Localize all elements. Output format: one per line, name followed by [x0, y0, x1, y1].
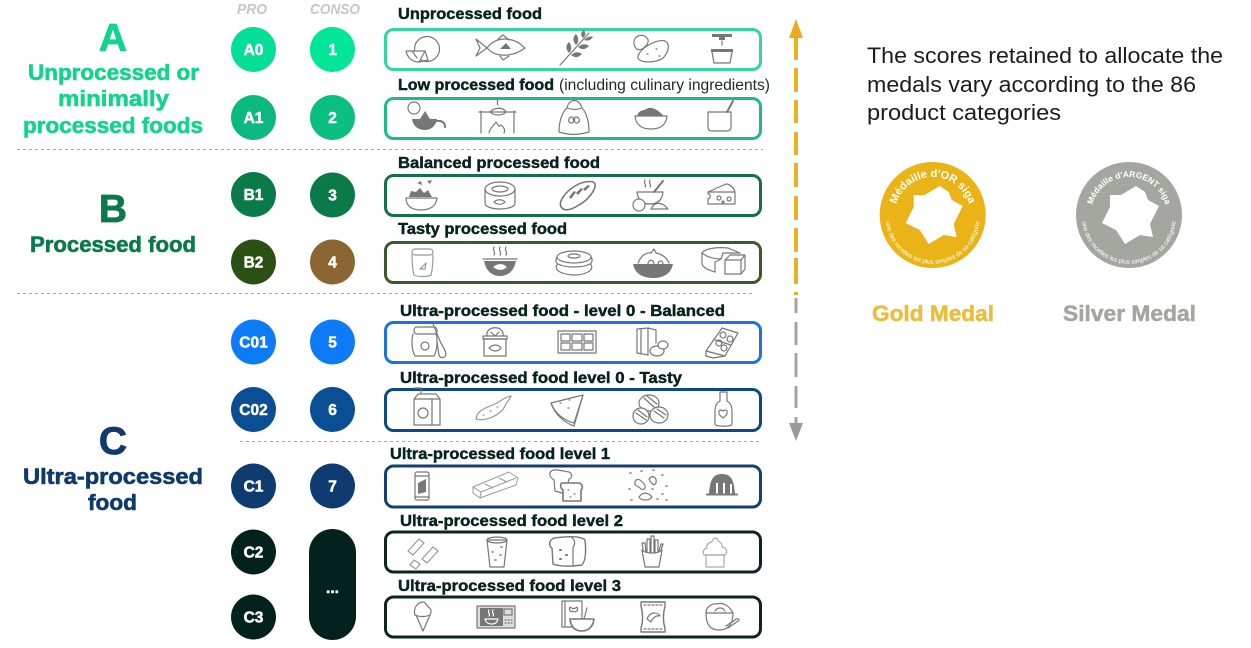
column heading: CONSO: CONSO [310, 1, 360, 18]
icon: orange [406, 36, 440, 62]
icon: chocolate bar [558, 331, 596, 353]
panel: category B heading: Processed food [30, 232, 196, 257]
badges: CONSO column: 7 [328, 478, 337, 496]
panel: Ultra-processed food level 0 Tasty: Ultra-processed food level 0 - Tasty [400, 370, 682, 387]
badges: PRO column: A0 [244, 42, 263, 59]
panel: Tasty processed food [384, 19, 1223, 638]
panel: category C heading: Ultra-processed [23, 464, 203, 489]
panel: Ultra-processed food level 0 Tasty [384, 19, 1223, 638]
panel: Ultra-processed food level 3 [386, 578, 760, 637]
panel: Ultra-processed food level 2: Ultra-processed food level 2 [400, 513, 623, 530]
icon: gold medal: Médaille d'OR siga [889, 169, 974, 204]
panel: category A heading: processed foods [23, 113, 203, 138]
icon: stew with vegetables [633, 180, 668, 211]
badges: PRO column: B2 [244, 254, 263, 272]
label: silver medal: Silver Medal [1063, 301, 1196, 326]
icon: madeleines [633, 395, 668, 424]
badges: CONSO column: 6 [328, 402, 337, 419]
panel: Ultra-processed food level 2 [384, 19, 1223, 638]
icon: crisps with salt [629, 470, 667, 500]
icon: chicken bowl [633, 249, 673, 278]
arrow: grey downward scale [789, 298, 803, 441]
icon: loaf of bread [550, 537, 586, 566]
icon: cupcake [703, 538, 727, 567]
icon: fish tin [485, 182, 515, 209]
arrow: gold upward scale [789, 19, 803, 295]
icon: toast slices [550, 470, 582, 501]
icon: candies [408, 539, 438, 569]
panel: category A heading [23, 17, 203, 138]
label: gold medal: Gold Medal [872, 301, 994, 326]
icon: cheese wheel [702, 248, 745, 274]
icon: fish bucket [483, 328, 507, 356]
icon: jar [412, 249, 433, 276]
icon: cooking pot with spoon [708, 101, 733, 131]
panel: Low processed food: (including culinary ingredients) [559, 77, 770, 94]
icon: cereal bar [473, 472, 518, 498]
icon: potatoes [634, 35, 668, 62]
column heading: PRO: PRO [237, 1, 267, 18]
icon: flan pudding [707, 474, 737, 494]
text block: medal explanation [867, 43, 1223, 125]
icon: gold medal: une des recettes les plus simples de sa catégorie [886, 222, 980, 264]
badges: PRO column: B1 [244, 187, 264, 204]
badges: PRO column: C1 [244, 478, 264, 496]
badges: CONSO column: 1 [328, 42, 337, 59]
icon: ice cream cone [414, 602, 431, 631]
icon: milk bottle [715, 392, 732, 426]
badges: PRO column: C2 [244, 544, 263, 562]
icon: gold medal [880, 162, 986, 268]
panel: category B heading: B [99, 188, 127, 231]
icon: soup bowl with fish [483, 247, 517, 276]
icon: silver medal: une des recettes les plus simples de sa catégorie [1082, 222, 1176, 264]
panel: Ultra-processed food level 0 Balanced [384, 19, 1223, 638]
badges: PRO column: C3 [244, 610, 264, 626]
text block: medal explanation: product categories [867, 100, 1061, 125]
badges: CONSO column: ... [326, 580, 339, 597]
icon: soda can [415, 472, 429, 500]
icon: crisps bag [641, 602, 665, 632]
panel: Low processed food [384, 19, 1223, 638]
badges: CONSO column: 2 [328, 110, 337, 127]
panel: category C heading [23, 420, 203, 515]
badges: CONSO column: 3 [328, 188, 337, 204]
icon: egg carton [706, 328, 738, 358]
text block: medal explanation: medals vary according to the 86 [867, 72, 1196, 97]
panel: Ultra-processed food level 3: Ultra-processed food level 3 [398, 578, 621, 595]
panel: Balanced processed food [384, 19, 1223, 638]
icon: silver medal [1076, 162, 1182, 268]
panel: Unprocessed food: Unprocessed food [398, 6, 542, 23]
badges: PRO column: C01 [239, 334, 268, 352]
icon: cereal box and bowl [562, 601, 594, 631]
panel: Low processed food: Low processed food [398, 77, 554, 94]
icon: flour sack [559, 100, 589, 134]
badges: CONSO column: 5 [328, 334, 337, 352]
icon: cereal pack with biscuits [637, 328, 668, 356]
icon: wheat [560, 30, 593, 65]
icon: baguette [560, 182, 595, 210]
icon: fish roasting over fire [479, 100, 516, 133]
icon: french fries [642, 536, 663, 567]
icon: crepe wedge [551, 395, 583, 426]
panel: category A heading: minimally [58, 86, 170, 111]
icon: microwave [477, 606, 515, 628]
panel: category C heading: C [99, 420, 127, 463]
icon: ice cream tub and spoon [706, 603, 739, 630]
icon: salad bowl [406, 180, 437, 210]
badges: PRO column: A1 [244, 110, 264, 127]
icon: oil pouring into a jar [711, 34, 733, 63]
badges: CONSO column: 4 [328, 254, 337, 272]
panel: Unprocessed food [384, 6, 1223, 638]
icon: juice carton [414, 388, 440, 425]
icon: smoothie cup [487, 537, 507, 567]
icon: silver medal: Médaille d'ARGENT siga [1087, 171, 1170, 205]
panel: category B heading [30, 188, 196, 257]
panel: category C heading: food [88, 490, 137, 515]
icon: bowl of grains [635, 108, 667, 129]
icon: pancake stack [556, 251, 592, 275]
panel: Tasty processed food: Tasty processed food [398, 221, 567, 238]
icon: cheese wedge [708, 184, 735, 204]
panel: Balanced processed food: Balanced processed food [398, 155, 600, 172]
icon: citrus juicer [408, 102, 445, 130]
panel: Ultra-processed food level 0 Balanced: Ultra-processed food - level 0 - Balanced [400, 303, 725, 320]
panel: category A heading: Unprocessed or [28, 60, 199, 85]
panel: category A heading: A [99, 17, 127, 60]
panel: Ultra-processed food level 1: Ultra-processed food level 1 [390, 446, 610, 463]
icon: battered shrimp [476, 396, 511, 420]
badges: PRO column [231, 27, 276, 640]
icon: jam jar with spoon [412, 324, 446, 358]
badges: PRO column: C02 [239, 402, 268, 419]
text block: medal explanation: The scores retained to allocate the [867, 43, 1223, 68]
icon: fish [476, 35, 525, 60]
badges: CONSO column [309, 27, 356, 640]
panel: Ultra-processed food level 1 [384, 19, 1223, 638]
